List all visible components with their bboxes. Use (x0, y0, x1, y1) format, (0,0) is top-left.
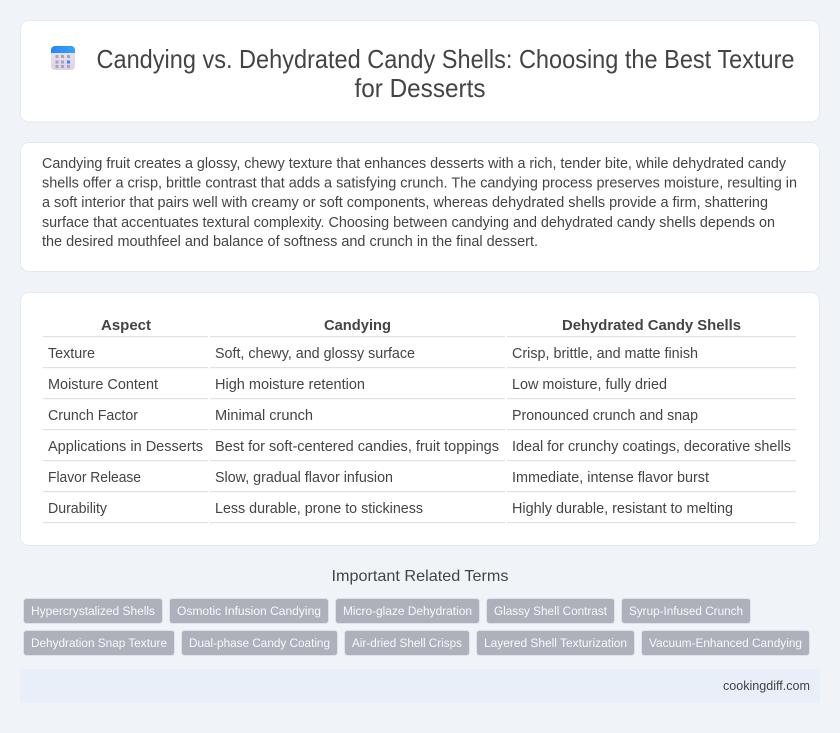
row: moisture content: Moisture Content (48, 377, 158, 393)
panel: comparison table (20, 292, 820, 546)
tag: Osmotic Infusion Candying (177, 604, 321, 618)
title (96, 46, 794, 103)
row: moisture content (48, 377, 667, 393)
row: crunch factor: Pronounced crunch and snap (512, 408, 698, 424)
row: flavor release (48, 470, 709, 486)
row: applications in desserts: Applications in Desserts (48, 439, 203, 455)
row: durability: Less durable, prone to stickiness (215, 501, 423, 517)
tag: Glassy Shell Contrast (494, 604, 608, 618)
row: texture: Crisp, brittle, and matte finish (512, 346, 698, 362)
row: moisture content: High moisture retention (215, 377, 365, 393)
tag: Micro-glaze Dehydration (343, 604, 472, 618)
description text: a soft interior that pairs well with creamy or soft components, whereas dehydrated shells provide a firm, shattering (42, 195, 768, 211)
table header: Aspect (101, 318, 151, 334)
row: crunch factor: Minimal crunch (215, 408, 313, 424)
tag: Hypercrystalized Shells (31, 604, 155, 618)
tag (24, 598, 162, 624)
table grid lines (43, 336, 796, 523)
tag (486, 598, 614, 624)
title: for Desserts (354, 75, 486, 103)
row: durability: Highly durable, resistant to melting (512, 501, 733, 517)
tag: Syrup-Infused Crunch (629, 604, 743, 618)
panel: description (20, 142, 820, 272)
tag (642, 630, 810, 656)
tag (622, 598, 750, 624)
tag (344, 630, 470, 656)
tag: Vacuum-Enhanced Candying (649, 636, 802, 650)
row: texture: Soft, chewy, and glossy surface (215, 346, 415, 362)
row: flavor release: Flavor Release (48, 470, 141, 486)
heading: important related terms: Important Related Terms (332, 568, 508, 585)
row: moisture content: Low moisture, fully dried (512, 377, 667, 393)
tag: Dehydration Snap Texture (31, 636, 167, 650)
tag: Layered Shell Texturization (484, 636, 627, 650)
description text (42, 156, 797, 250)
footer (20, 669, 820, 703)
tag (336, 598, 480, 624)
table header (101, 318, 741, 334)
table header: Dehydrated Candy Shells (562, 318, 741, 334)
description text: surface that accentuates textural complexity. Choosing between candying and dehydrated candy shells depends on (42, 215, 775, 231)
row: durability (48, 501, 733, 517)
row: durability: Durability (48, 501, 108, 517)
tag (182, 630, 338, 656)
row: flavor release: Slow, gradual flavor infusion (215, 470, 393, 486)
tag (476, 630, 634, 656)
table header: Candying (324, 318, 391, 334)
icon: calendar (51, 46, 75, 70)
tag (170, 598, 328, 624)
panel: title header (20, 20, 820, 122)
tag (24, 630, 174, 656)
row: texture (48, 346, 698, 362)
title: Candying vs. Dehydrated Candy Shells: Choosing the Best Texture (96, 46, 794, 74)
description text: shells offer a crisp, brittle contrast that adds a satisfying crunch. The candying process preserves moisture, resulting in (42, 176, 797, 192)
row: applications in desserts (48, 439, 791, 455)
row: flavor release: Immediate, intense flavor burst (512, 470, 709, 486)
description text: Candying fruit creates a glossy, chewy texture that enhances desserts with a rich, tender bite, while dehydrated candy (42, 156, 787, 172)
description text: the desired mouthfeel and balance of softness and crunch in the final dessert. (42, 234, 538, 250)
footer source: cookingdiff.com (723, 678, 810, 693)
row: crunch factor: Crunch Factor (48, 408, 138, 424)
related term tags (24, 598, 810, 656)
table rows (48, 346, 791, 517)
row: crunch factor (48, 408, 698, 424)
row: applications in desserts: Ideal for crunchy coatings, decorative shells (512, 439, 791, 455)
tag: Dual-phase Candy Coating (189, 636, 330, 650)
row: texture: Texture (48, 346, 95, 362)
tag: Air-dried Shell Crisps (352, 636, 462, 650)
row: applications in desserts: Best for soft-centered candies, fruit toppings (215, 439, 499, 455)
